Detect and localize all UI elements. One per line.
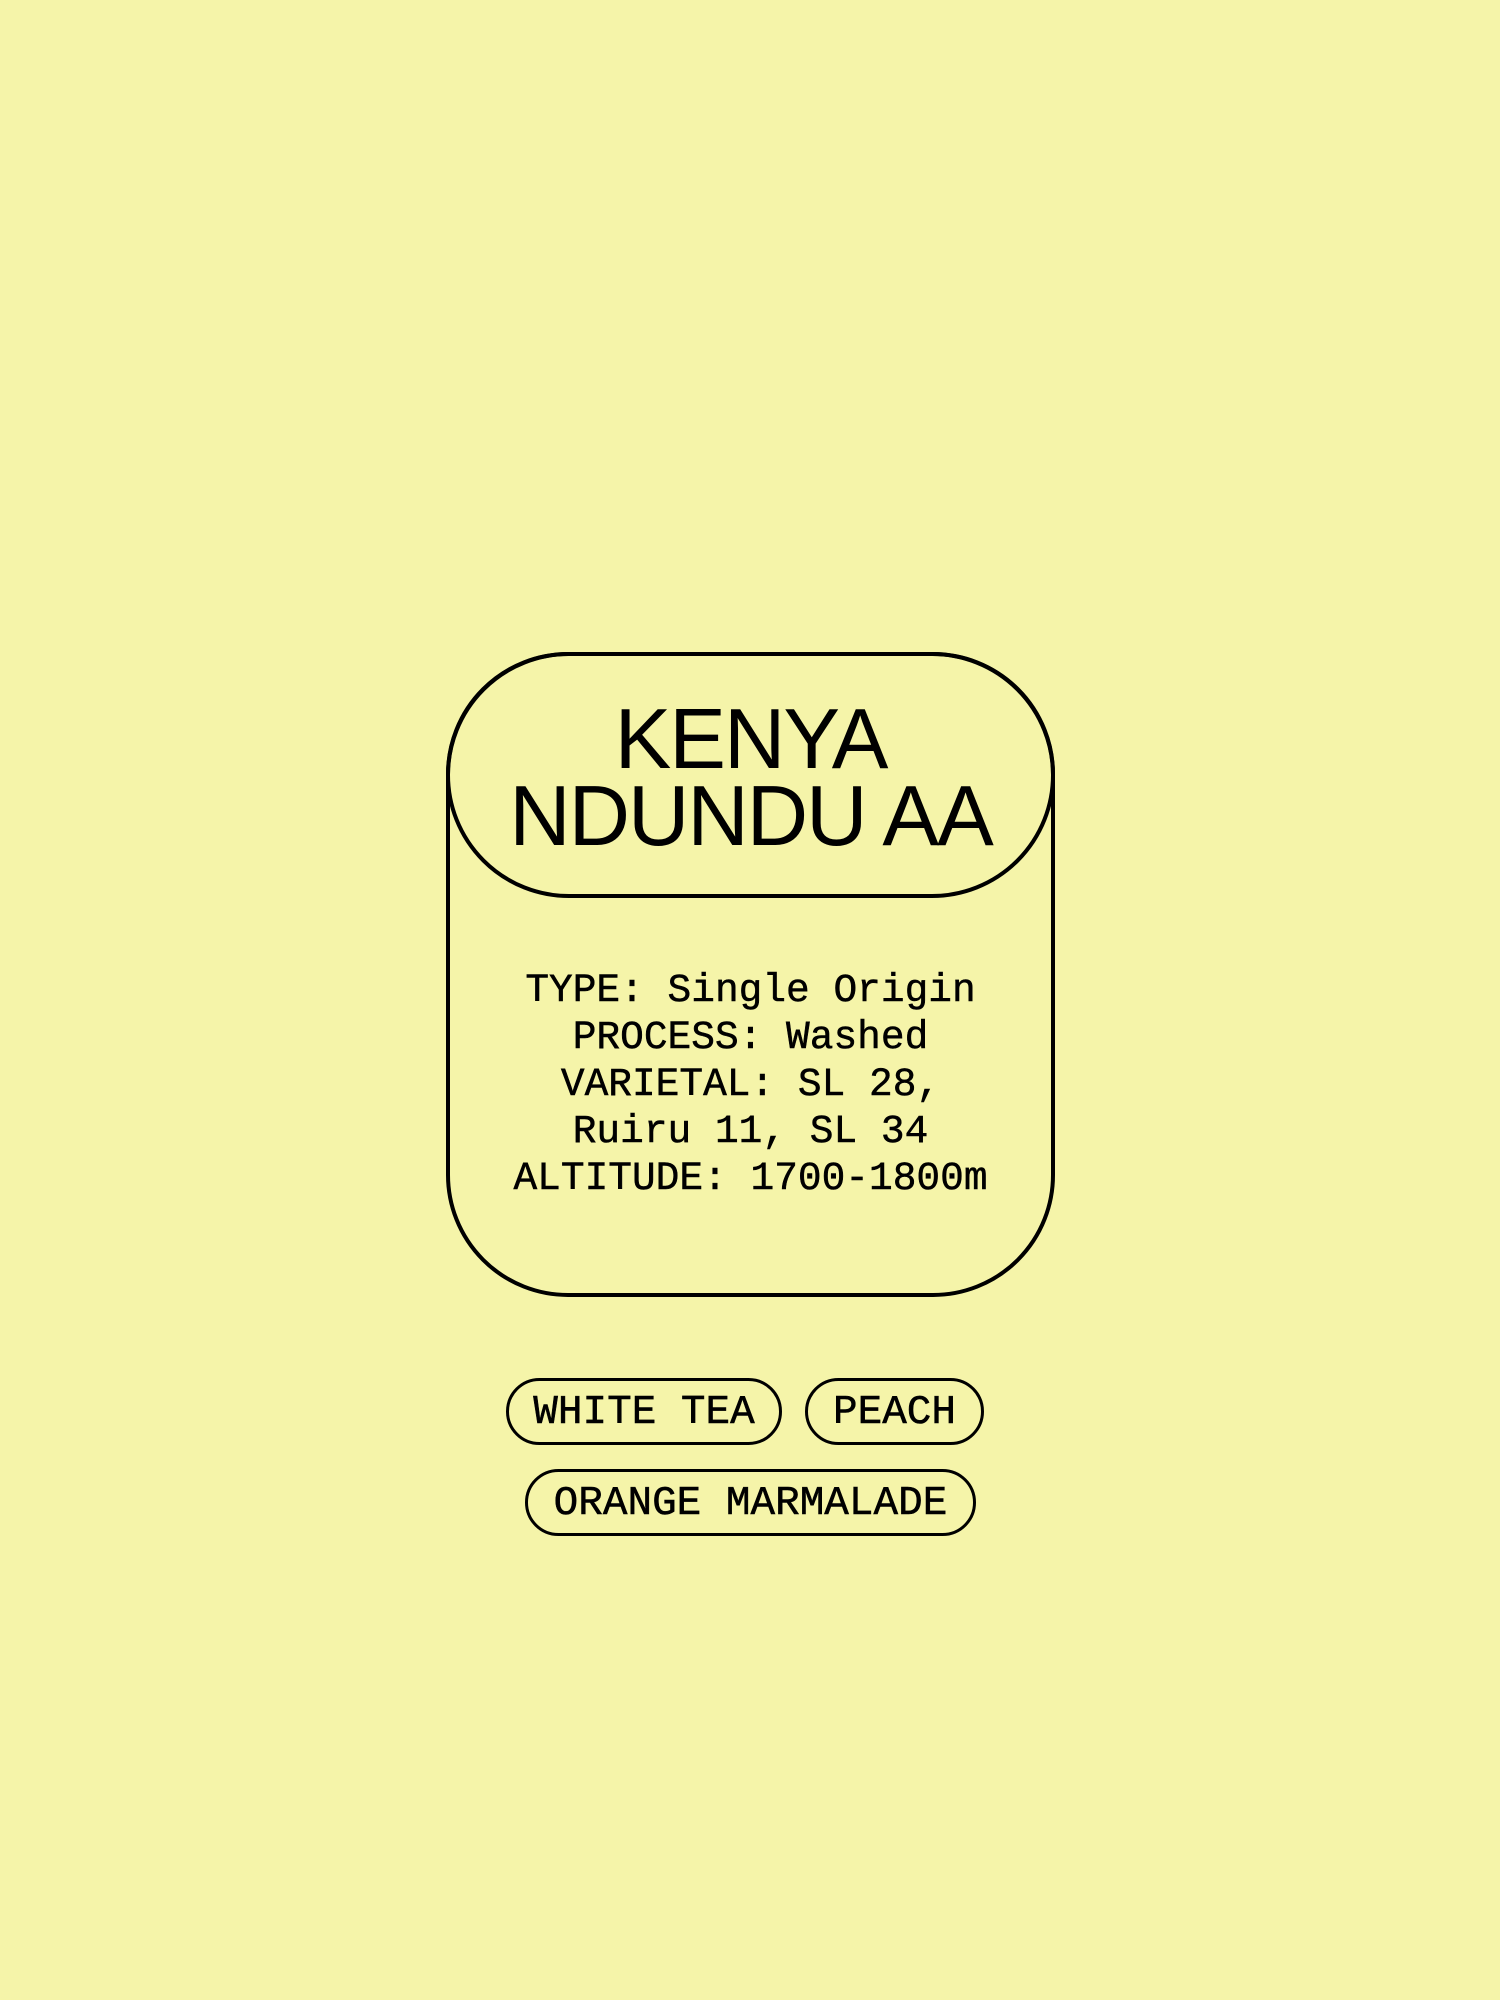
text block: coffee details: ALTITUDE: 1700-1800m: [513, 1156, 988, 1201]
title: KENYA: [615, 692, 886, 787]
text block: coffee details: [513, 968, 988, 1201]
tag: white tea: [506, 1378, 782, 1445]
tag: orange marmalade: [525, 1469, 976, 1536]
text block: coffee details: PROCESS: Washed: [573, 1015, 928, 1060]
panel: coffee card: [446, 652, 1055, 1297]
text block: coffee details: Ruiru 11, SL 34: [573, 1109, 928, 1154]
tag: orange marmalade: ORANGE MARMALADE: [554, 1481, 947, 1527]
tag: white tea: WHITE TEA: [533, 1390, 755, 1436]
text block: coffee details: VARIETAL: SL 28,: [561, 1062, 940, 1107]
header pill: [446, 652, 1055, 898]
title: NDUNDU AA: [509, 769, 992, 864]
title: [509, 692, 994, 864]
text block: coffee details: TYPE: Single Origin: [525, 968, 976, 1013]
tag: peach: [805, 1378, 984, 1445]
tag: peach: PEACH: [833, 1390, 956, 1436]
